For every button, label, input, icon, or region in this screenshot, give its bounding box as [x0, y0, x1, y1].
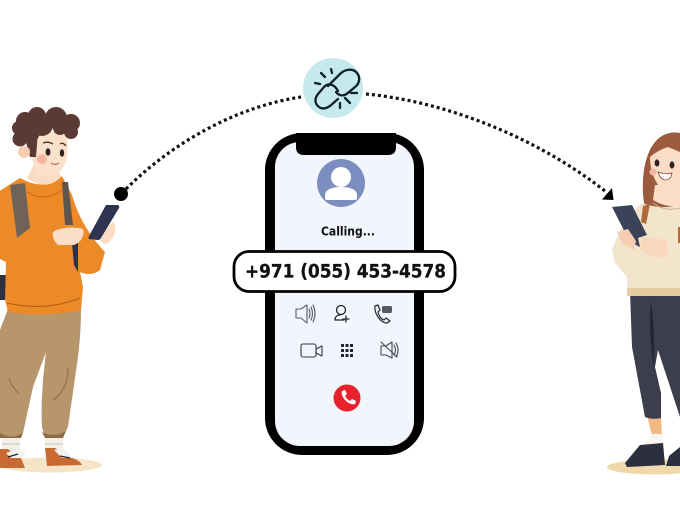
- socks: [2, 438, 63, 451]
- shoes: [0, 449, 25, 468]
- phone number pill: +971 (055) 453-4578: [245, 262, 446, 282]
- icon: broken link badge: [303, 58, 363, 118]
- phone: [265, 133, 424, 455]
- icon: muted speaker: [381, 342, 398, 358]
- smile: [658, 172, 672, 180]
- ear: [18, 146, 30, 158]
- tablet phone: [612, 205, 647, 247]
- phone body: [265, 133, 424, 455]
- backpack lower part: [0, 275, 8, 300]
- backpack strap: [641, 204, 680, 243]
- hand holding arm: [640, 237, 668, 258]
- end call button: [334, 384, 360, 412]
- icon: keypad: [341, 344, 353, 357]
- neck: [27, 166, 61, 185]
- curly hair: [12, 107, 80, 157]
- face: [32, 132, 68, 176]
- hand on sweater: [53, 228, 84, 245]
- hand on tablet: [617, 229, 636, 250]
- icon: video camera: [301, 344, 322, 357]
- calling label: Calling...: [321, 224, 375, 238]
- icon: HD call: [375, 305, 392, 323]
- sock: [643, 434, 664, 448]
- ankle: [647, 416, 662, 435]
- dotted connection arc: right with arrowhead: [366, 94, 614, 200]
- person: caller on the left: [0, 107, 119, 472]
- icon: speaker: [296, 305, 315, 323]
- phone in hand: [88, 205, 119, 240]
- backpack straps: [10, 183, 30, 238]
- phone number pill: [234, 252, 455, 292]
- neck: [653, 185, 680, 206]
- dark trousers: [630, 291, 680, 419]
- phone screen: [275, 142, 414, 446]
- icon: add contact: [335, 306, 349, 322]
- trousers: [0, 306, 81, 437]
- shoes: [625, 443, 665, 467]
- hand holding phone: [100, 222, 115, 244]
- ground shadow: [607, 460, 680, 474]
- person: receiver on the right: [607, 132, 680, 474]
- beige sweater: [612, 203, 680, 296]
- icon: contact avatar: [317, 159, 365, 207]
- long hair: [643, 132, 680, 215]
- face: [650, 147, 680, 192]
- phone notch: [296, 133, 396, 155]
- dotted connection arc: left: [114, 97, 301, 201]
- orange sweater: [0, 176, 105, 315]
- ground shadow: [0, 458, 102, 472]
